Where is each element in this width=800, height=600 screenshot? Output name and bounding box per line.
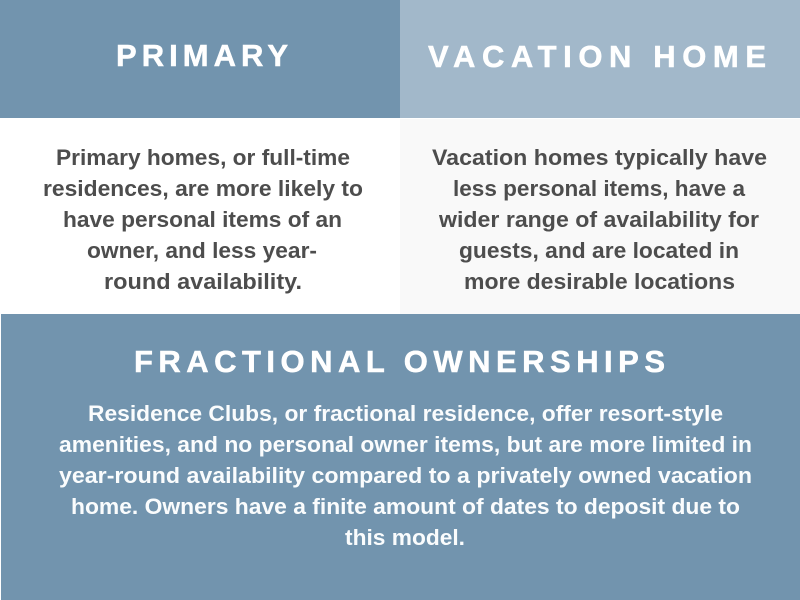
vacation home description: more desirable locations [464, 269, 735, 294]
fractional ownerships description: amenities, and no personal owner items, but are more limited in [59, 432, 752, 457]
heading: fractional ownerships: FRACTIONAL OWNERSHIPS [134, 344, 665, 379]
fractional ownerships description: Residence Clubs, or fractional residence, offer resort-style [88, 401, 723, 426]
heading: vacation home: VACATION HOME [428, 39, 766, 74]
vacation home description: guests, and are located in [459, 238, 739, 263]
panel: fractional ownerships [1, 314, 800, 600]
panel: primary [0, 0, 400, 294]
primary description: round availability. [104, 269, 302, 294]
primary description [43, 145, 363, 294]
primary description: have personal items of an [63, 207, 342, 232]
vacation home description [432, 145, 767, 294]
fractional ownerships description: year-round availability compared to a privately owned vacation [59, 463, 752, 488]
fractional ownerships description: home. Owners have a finite amount of dates to deposit due to [71, 494, 740, 519]
primary description: residences, are more likely to [43, 176, 363, 201]
fractional ownerships description [59, 401, 752, 550]
vacation home description: wider range of availability for [438, 207, 759, 232]
primary description: Primary homes, or full-time [56, 145, 350, 170]
panel: vacation home [400, 0, 800, 314]
vacation home description: less personal items, have a [453, 176, 745, 201]
primary description: owner, and less year- [87, 238, 317, 263]
heading: primary: PRIMARY [116, 38, 288, 73]
vacation home description: Vacation homes typically have [432, 145, 767, 170]
fractional ownerships description: this model. [345, 525, 465, 550]
